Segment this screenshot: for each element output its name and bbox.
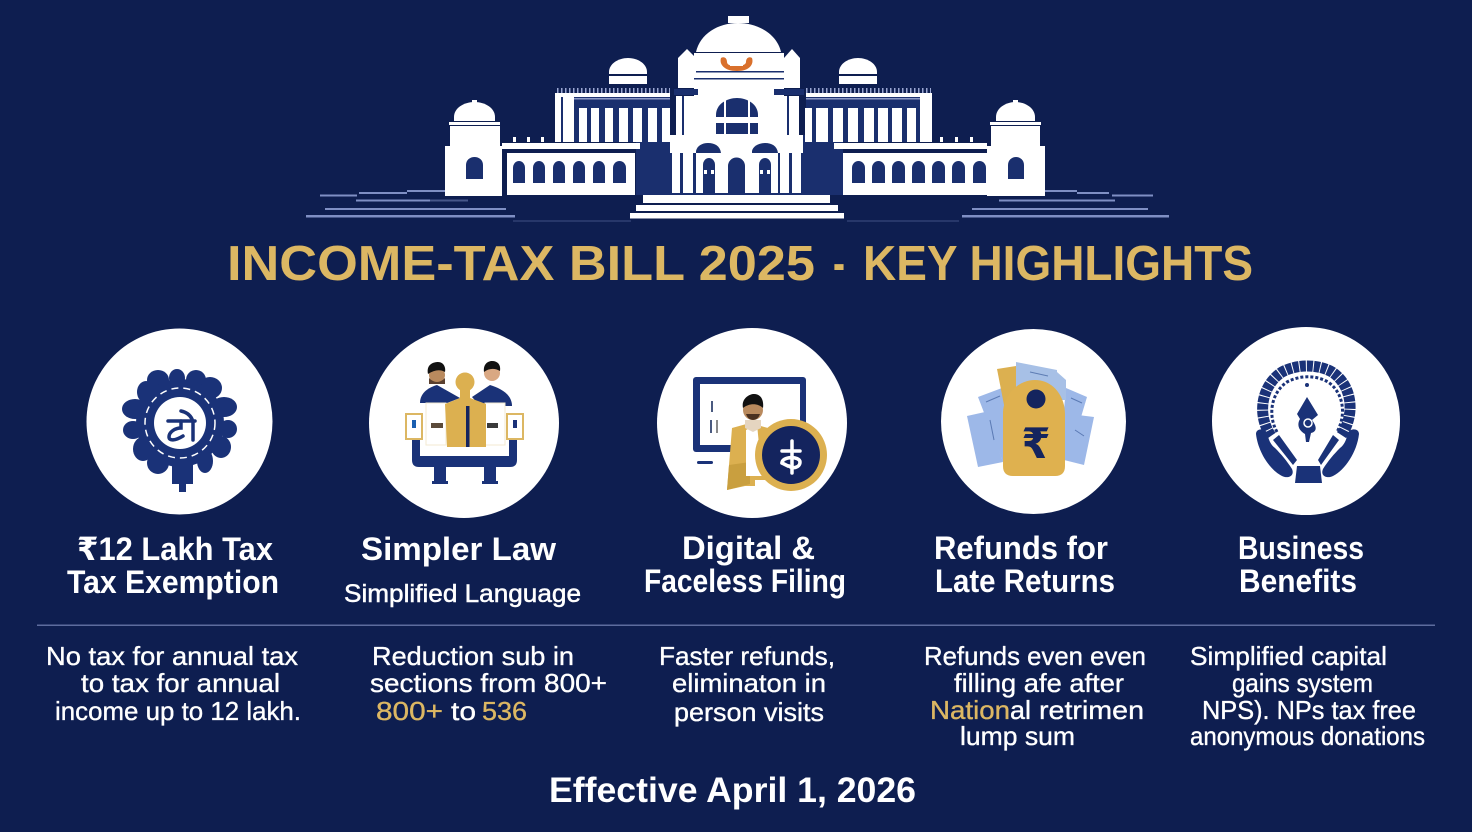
central dark backdrop xyxy=(636,135,843,195)
right lower wing xyxy=(834,137,987,195)
right outer tower xyxy=(987,100,1045,196)
text block: business benefits: anonymous donations xyxy=(1190,721,1425,751)
text block: simpler law: to xyxy=(451,696,476,726)
text block: refunds: retrimen xyxy=(1039,695,1144,725)
text block: refunds: filling afe after xyxy=(954,668,1124,698)
icon: coin xyxy=(755,419,827,491)
heading: refunds: Refunds for xyxy=(934,530,1108,566)
text block: business benefits: gains system xyxy=(1232,668,1373,698)
emblem on central tower xyxy=(721,57,752,71)
icon: right person xyxy=(472,361,512,406)
central tower and dome xyxy=(674,16,804,135)
heading: simpler law: Simplified Language xyxy=(344,580,581,608)
icon: central figure xyxy=(1297,383,1318,442)
icon: papers xyxy=(406,403,523,445)
text block: refunds: al xyxy=(1010,695,1031,725)
title: - xyxy=(833,237,845,291)
icon: price tag xyxy=(1003,380,1065,476)
heading: simpler law: Simpler Law xyxy=(361,531,556,567)
text block: simpler law: Reduction sub in xyxy=(372,641,574,671)
heading: simpler law xyxy=(344,531,581,608)
text block: digital filing xyxy=(659,641,835,727)
left colonnade wing xyxy=(555,58,670,142)
panel: business benefits icon xyxy=(1212,327,1400,515)
panel: refunds icon xyxy=(941,329,1126,514)
text block: business benefits xyxy=(1190,641,1425,751)
lines on documents xyxy=(986,372,1084,440)
text block: business benefits: Simplified capital xyxy=(1190,641,1387,671)
heading: digital filing xyxy=(644,530,846,599)
text block: tax exemption: to tax for annual xyxy=(81,668,280,698)
heading: tax exemption: Tax Exemption xyxy=(67,564,279,600)
text block: simpler law: 536 xyxy=(482,696,527,726)
icon: script mark xyxy=(168,411,195,440)
panel: digital filing icon xyxy=(657,328,847,518)
text block: refunds: Nation xyxy=(930,695,1010,725)
panel: tax exemption icon xyxy=(86,328,272,514)
icon: desk xyxy=(412,438,517,484)
heading: digital filing: Faceless Filing xyxy=(644,563,846,599)
icon: price tag: ₹ xyxy=(1021,420,1051,467)
text block: simpler law xyxy=(370,641,607,726)
heading: business benefits xyxy=(1238,530,1364,599)
text block: business benefits: NPS). NPs tax free xyxy=(1202,695,1416,725)
title: INCOME-TAX BILL 2025 xyxy=(227,237,815,291)
central portico xyxy=(670,135,803,193)
text block: simpler law: sections from 800+ xyxy=(370,668,607,698)
text block: simpler law: 800+ xyxy=(376,696,443,726)
heading: tax exemption xyxy=(67,531,279,600)
heading: refunds: Late Returns xyxy=(935,563,1115,599)
text block: tax exemption xyxy=(46,641,301,726)
title: KEY HIGHLIGHTS xyxy=(863,237,1253,291)
icon: bead arch xyxy=(1263,366,1350,436)
left outer tower xyxy=(445,100,502,196)
icon: person xyxy=(727,394,768,490)
front steps xyxy=(630,195,844,218)
icon: hands xyxy=(1256,429,1359,483)
icon: monitor xyxy=(693,377,806,464)
icon: left person xyxy=(420,362,460,403)
text block: digital filing: person visits xyxy=(674,697,824,727)
icon: central gold figure xyxy=(445,372,486,447)
text block: refunds xyxy=(924,641,1146,751)
heading: business benefits: Benefits xyxy=(1239,563,1357,599)
title xyxy=(227,237,1253,291)
footer: effective date: Effective April 1, 2026 xyxy=(549,771,916,810)
text block: tax exemption: No tax for annual tax xyxy=(46,641,298,671)
icon: documents xyxy=(967,362,1094,467)
ground lines left xyxy=(306,190,631,222)
text block: refunds: Refunds even even xyxy=(924,641,1146,671)
text block: digital filing: eliminaton in xyxy=(672,668,826,698)
left lower wing xyxy=(502,137,640,195)
panel: simpler law icon xyxy=(369,328,559,518)
ground lines right xyxy=(847,190,1169,222)
text block: tax exemption: income up to 12 lakh. xyxy=(55,696,301,726)
heading: business benefits: Business xyxy=(1238,530,1364,566)
text block: digital filing: Faster refunds, xyxy=(659,641,835,671)
heading: refunds xyxy=(934,530,1115,599)
heading: tax exemption: ₹12 Lakh Tax xyxy=(77,531,273,567)
text block: refunds: lump sum xyxy=(960,721,1075,751)
illustration: parliament building xyxy=(306,16,1169,222)
right colonnade wing xyxy=(805,58,932,142)
icon: flower emblem xyxy=(122,369,237,492)
heading: digital filing: Digital & xyxy=(682,530,815,566)
